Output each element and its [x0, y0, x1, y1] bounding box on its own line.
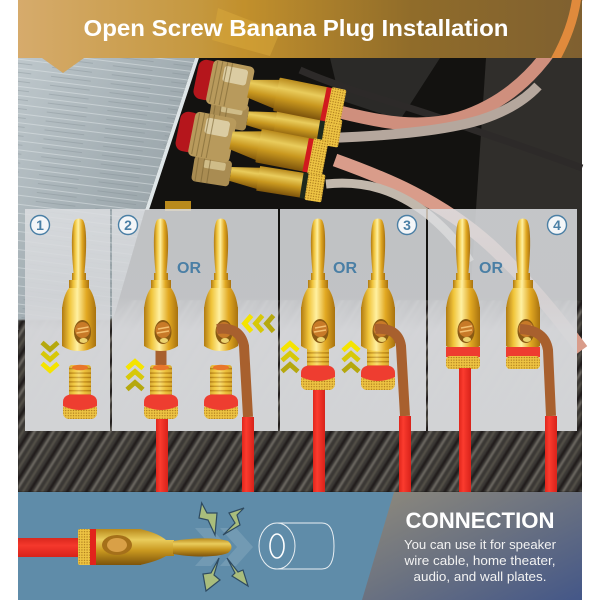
arrows down [42, 342, 58, 370]
metal case [18, 0, 218, 330]
header banner [18, 0, 582, 73]
step number 4 [548, 216, 566, 234]
icon: spark bottom left [203, 558, 220, 591]
banana plug [78, 529, 232, 565]
step number 2 [118, 216, 138, 234]
panel: step 4 [428, 209, 577, 492]
panel: step 1 [25, 209, 110, 431]
title: Open Screw Banana Plug Installation [84, 15, 508, 41]
pale direction chevrons [195, 528, 253, 566]
assembled plug with straight wire [446, 218, 480, 492]
binding post back top [208, 98, 343, 148]
pink speaker wire lower [335, 160, 582, 350]
panel: connection illustration [18, 492, 582, 600]
description [403, 537, 557, 584]
step number 1: 1 [36, 217, 44, 233]
panel: connection text [362, 492, 582, 600]
OR label: OR [479, 260, 503, 277]
icon: spark top left [199, 503, 217, 535]
step number 2: 2 [124, 217, 132, 233]
plug with straight wire [144, 218, 178, 492]
step number 1 [30, 216, 50, 234]
OR label: OR [177, 260, 201, 277]
orange wire behind banner [555, 0, 577, 60]
small gold connector [165, 201, 191, 211]
arrows up left [282, 344, 298, 372]
arrows up [127, 362, 143, 390]
silver speaker wire lower [326, 183, 470, 262]
arrows up right [343, 344, 359, 372]
binding post front top [191, 56, 347, 130]
plug with straight wire [301, 218, 335, 492]
silver speaker wire top [330, 86, 538, 138]
screw [63, 365, 97, 419]
red cable [18, 538, 80, 557]
description: You can use it for speaker [404, 537, 557, 552]
assembled plug with bent wire [506, 218, 557, 492]
step number 3 [398, 216, 416, 234]
wooden floor [18, 300, 582, 492]
plug with bent wire [361, 218, 411, 492]
step number 3: 3 [403, 217, 411, 233]
description: audio, and wall plates. [414, 569, 546, 584]
binding post front lower [174, 108, 329, 181]
description: wire cable, home theater, [403, 553, 556, 568]
pink speaker wire top [340, 0, 577, 124]
panel: step 2 [112, 209, 278, 492]
plug with bent wire [204, 218, 254, 492]
icon: spark bottom right [227, 558, 248, 586]
gold connector behind banner [212, 8, 280, 56]
OR label: OR [333, 260, 357, 277]
black cable [300, 70, 582, 168]
plug [62, 218, 96, 351]
socket outline [259, 523, 334, 569]
arrows left [244, 316, 274, 332]
icon: spark top right [223, 508, 244, 535]
panel: step 3 [280, 209, 426, 492]
step number 4: 4 [553, 217, 561, 233]
binding post back lower [191, 154, 326, 202]
heading: CONNECTION [406, 508, 554, 533]
